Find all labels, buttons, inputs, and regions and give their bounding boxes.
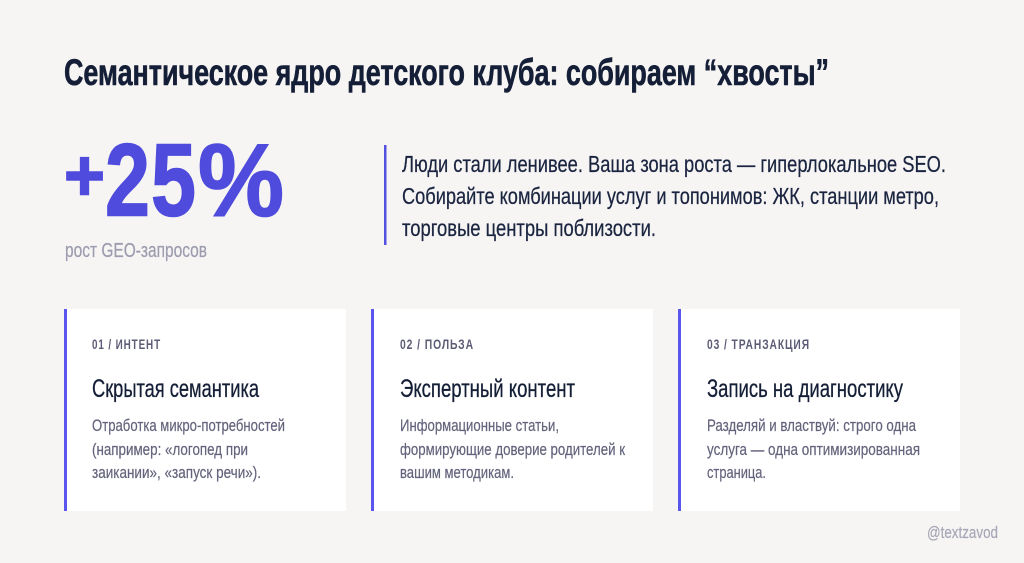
card 02 body: Информационные статьи, — [400, 417, 559, 435]
panel: card 01 intent — [64, 309, 346, 511]
stat number: 5 — [151, 122, 196, 238]
card 03 body: Разделяй и властвуй: строго одна — [707, 417, 917, 435]
panel: card 03 transaction — [678, 309, 960, 511]
card 03 heading: Запись на диагностику — [707, 375, 903, 403]
card 02 label: 02 / ПОЛЬЗА — [400, 337, 474, 352]
card 03 label: 03 / ТРАНЗАКЦИЯ — [707, 337, 810, 352]
card 01 body — [92, 417, 285, 482]
stat caption: рост GEO-запросов — [65, 240, 207, 262]
footer handle: @textzavod — [927, 523, 998, 542]
lead text — [402, 151, 946, 241]
card 03 body: услуга — одна оптимизированная — [707, 441, 920, 459]
accent bar — [384, 145, 386, 245]
card 02 body: формирующие доверие родителей к — [400, 441, 626, 459]
card 02 body: вашим методикам. — [400, 464, 514, 482]
panel: card 02 benefit — [371, 309, 653, 511]
card 03 body: страница. — [707, 464, 766, 482]
card 02 body — [400, 417, 626, 482]
stat number: + — [64, 136, 105, 216]
big stat: +25% growth — [64, 122, 284, 262]
card 01 heading: Скрытая семантика — [92, 375, 259, 403]
lead text: торговые центры поблизости. — [402, 215, 656, 241]
card 01 body: (например: «логопед при — [92, 441, 248, 459]
card 01 label: 01 / ИНТЕНТ — [92, 337, 161, 352]
stat number: 2 — [105, 122, 150, 238]
card 01 body: заикании», «запуск речи»). — [92, 464, 261, 482]
stat number — [64, 122, 284, 238]
card 03 body — [707, 417, 920, 482]
card 01 body: Отработка микро-потребностей — [92, 417, 285, 435]
card 02 heading: Экспертный контент — [400, 375, 575, 403]
stat number: % — [198, 122, 284, 238]
lead paragraph with accent bar — [384, 145, 946, 245]
